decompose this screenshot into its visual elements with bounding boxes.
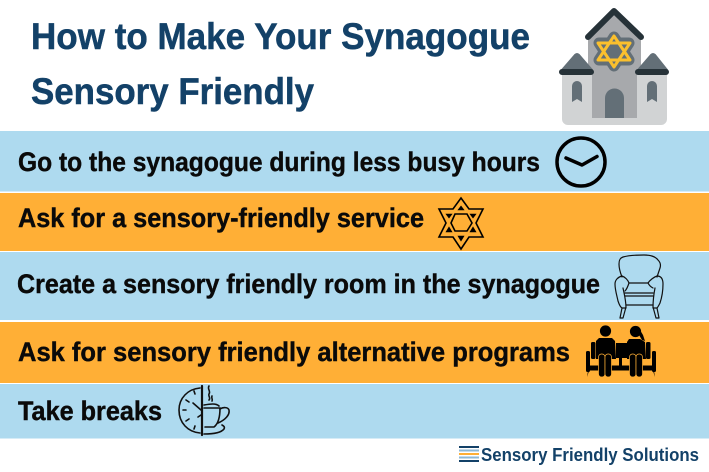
title: How to Make Your Synagogue <box>31 16 530 57</box>
icon: logo stripes <box>459 446 479 462</box>
logo: Sensory Friendly Solutions <box>459 444 699 465</box>
panel: row 2 <box>0 193 709 251</box>
icon: armchair <box>615 255 663 318</box>
text: row 2: Ask for a sensory-friendly service <box>18 203 424 233</box>
text: row 5: Take breaks <box>18 396 162 426</box>
panel: row 4 <box>0 322 709 383</box>
text: row 4: Ask for sensory friendly alternative programs <box>18 337 570 367</box>
icon: clock <box>557 138 605 186</box>
panel: row 1 <box>0 131 709 192</box>
title <box>31 16 530 112</box>
text: row 3: Create a sensory friendly room in the synagogue <box>17 269 600 299</box>
icon: star of David <box>439 198 483 249</box>
icon: synagogue <box>562 11 667 125</box>
title: Sensory Friendly <box>31 71 314 112</box>
panel: row 3 <box>0 252 709 320</box>
text: row 1: Go to the synagogue during less busy hours <box>18 147 540 177</box>
panel: row 5 <box>0 384 709 438</box>
icon: people on a bench <box>586 325 656 377</box>
icon: clock and coffee cup <box>179 386 229 435</box>
